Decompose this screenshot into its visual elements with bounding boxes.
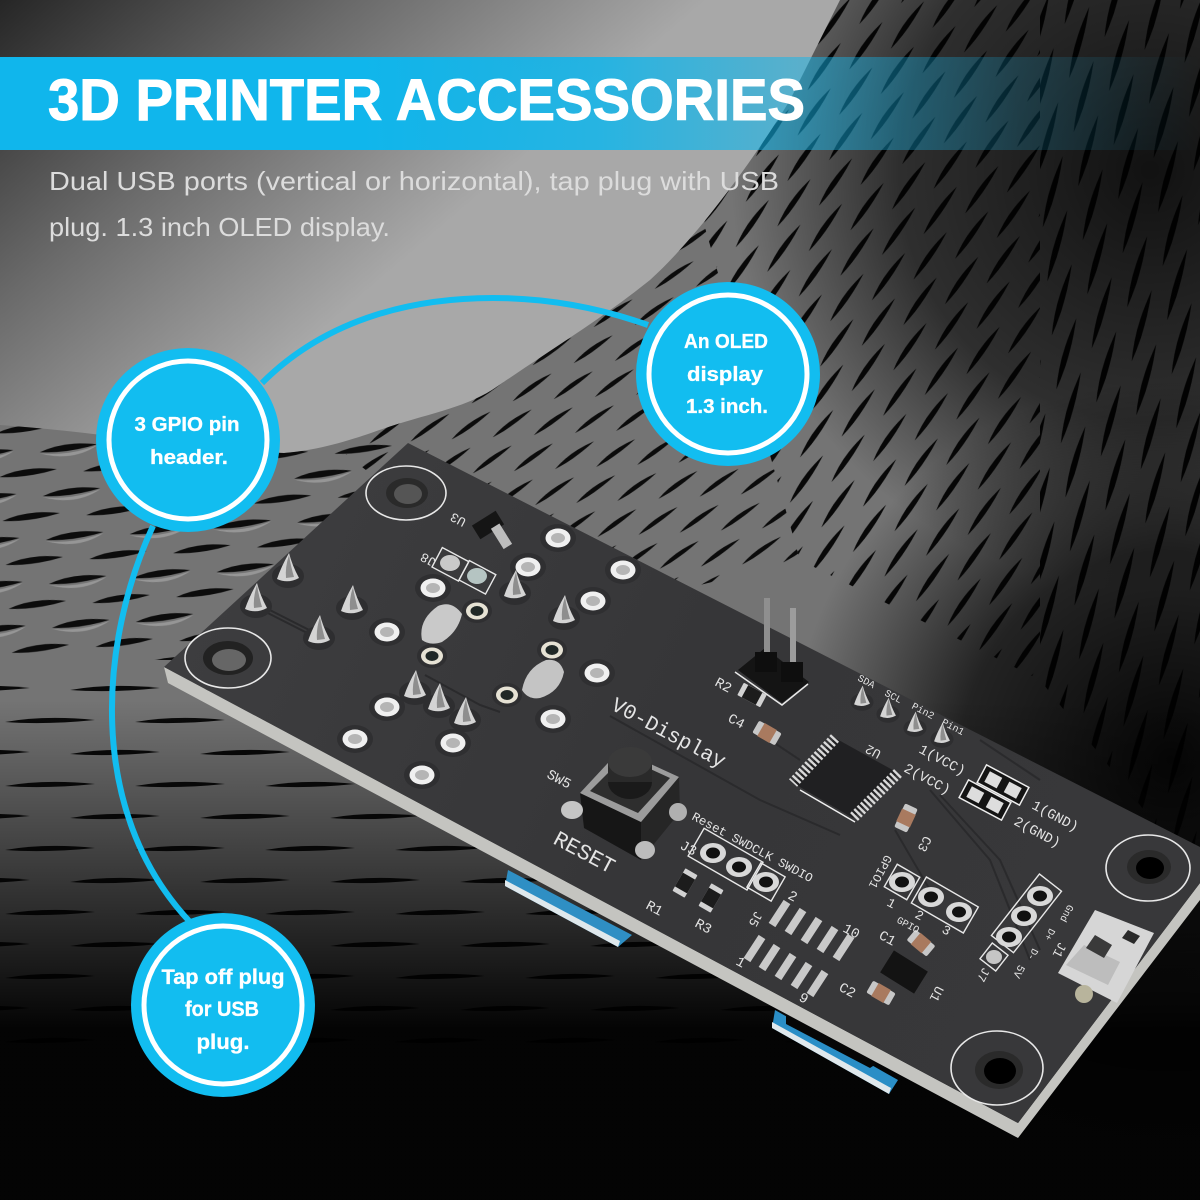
callout: tap off plug xyxy=(131,913,315,1097)
silkscreen labels: GPIO xyxy=(894,916,920,937)
blue modules under the board xyxy=(505,870,898,1094)
callout: OLED display: display xyxy=(687,364,764,386)
silkscreen labels: J5 xyxy=(745,908,765,929)
silkscreen labels: 9 xyxy=(796,990,811,1008)
mounting holes xyxy=(185,466,1190,1105)
silkscreen labels: J7 xyxy=(973,965,992,984)
microcontroller chip xyxy=(793,738,898,822)
silkscreen labels: J1 xyxy=(1049,939,1069,960)
silkscreen labels xyxy=(418,509,1081,1008)
silkscreen labels: R1 xyxy=(643,898,665,920)
description text: Dual USB ports (vertical or horizontal), tap plug with USB xyxy=(49,166,779,196)
silkscreen labels: D- xyxy=(1024,946,1039,962)
through hole headers xyxy=(688,828,1061,971)
solder pads xyxy=(240,524,641,789)
silkscreen labels: 2(GND) xyxy=(1011,814,1063,852)
callout: tap off plug: plug. xyxy=(196,1031,250,1054)
callout: OLED display: 1.3 inch. xyxy=(686,396,768,418)
pin header xyxy=(735,598,809,705)
silkscreen labels: D+ xyxy=(1041,926,1056,942)
callout: GPIO pin header: 3 GPIO pin xyxy=(134,414,240,436)
board traces xyxy=(256,603,1040,960)
silkscreen labels: 1(VCC) xyxy=(916,742,968,780)
silkscreen labels: 2(VCC) xyxy=(901,761,953,799)
silkscreen labels: 1 xyxy=(733,954,748,972)
description text xyxy=(49,166,779,242)
silkscreen labels: U3 xyxy=(448,509,469,529)
silkscreen labels: Pin2 xyxy=(909,701,936,723)
silkscreen labels: J3 xyxy=(677,838,699,860)
callout: OLED display: An OLED xyxy=(684,331,768,353)
silkscreen labels: R2 xyxy=(712,675,734,697)
silkscreen labels: C3 xyxy=(914,833,934,854)
silkscreen labels: 1 xyxy=(884,895,898,912)
silkscreen labels: 2 xyxy=(912,907,926,924)
large solder blobs xyxy=(421,604,564,698)
reset push button xyxy=(561,747,687,860)
silkscreen labels: V0-Display xyxy=(607,695,729,774)
callout: GPIO pin header xyxy=(96,348,280,532)
callout: OLED display xyxy=(636,282,820,466)
circuit board xyxy=(164,443,1200,1138)
title banner xyxy=(0,57,1200,150)
connector arc: GPIO to OLED xyxy=(262,298,648,383)
silkscreen labels: GPIO1 xyxy=(865,852,894,891)
silkscreen labels: Pin1 xyxy=(939,717,966,739)
silkscreen labels: J8 xyxy=(418,549,439,569)
jumper pads xyxy=(959,765,1029,820)
silkscreen labels: C1 xyxy=(876,928,898,950)
silkscreen labels: SCL xyxy=(882,689,903,707)
board top face xyxy=(164,443,1200,1123)
silkscreen labels: Reset SWDCLK SWDIO xyxy=(689,810,815,886)
micro USB connector xyxy=(1058,910,1154,1003)
chip U3 and J8 xyxy=(432,511,512,594)
SDA SCL pin pads xyxy=(850,686,954,748)
silkscreen labels: 3 xyxy=(939,922,953,939)
silkscreen labels: C4 xyxy=(725,711,747,733)
silkscreen labels: Gnd xyxy=(1056,902,1075,924)
description text: plug. 1.3 inch OLED display. xyxy=(49,212,390,242)
silkscreen labels: RESET xyxy=(549,827,619,880)
resistors and capacitors xyxy=(672,683,936,1006)
silkscreen labels: C2 xyxy=(836,980,858,1002)
silkscreen labels: SDA xyxy=(855,674,876,692)
silkscreen labels: 5V xyxy=(1009,962,1026,980)
board edge xyxy=(164,667,1200,1138)
callout: tap off plug: Tap off plug xyxy=(162,966,284,989)
connector arc: GPIO to USB plug xyxy=(112,526,190,922)
silkscreen labels: 2 xyxy=(785,888,800,906)
title: 3D PRINTER ACCESSORIES xyxy=(48,68,805,133)
silkscreen labels: 10 xyxy=(840,921,862,943)
callout: GPIO pin header: header. xyxy=(150,447,228,469)
silkscreen labels: U1 xyxy=(926,983,946,1004)
flat connector pads J5 xyxy=(747,902,851,995)
silkscreen labels: 1(GND) xyxy=(1029,798,1081,836)
silkscreen labels: SW5 xyxy=(544,767,573,793)
callout: tap off plug: for USB xyxy=(185,998,259,1021)
silkscreen labels: U2 xyxy=(863,741,884,761)
silkscreen labels: R3 xyxy=(692,916,714,938)
